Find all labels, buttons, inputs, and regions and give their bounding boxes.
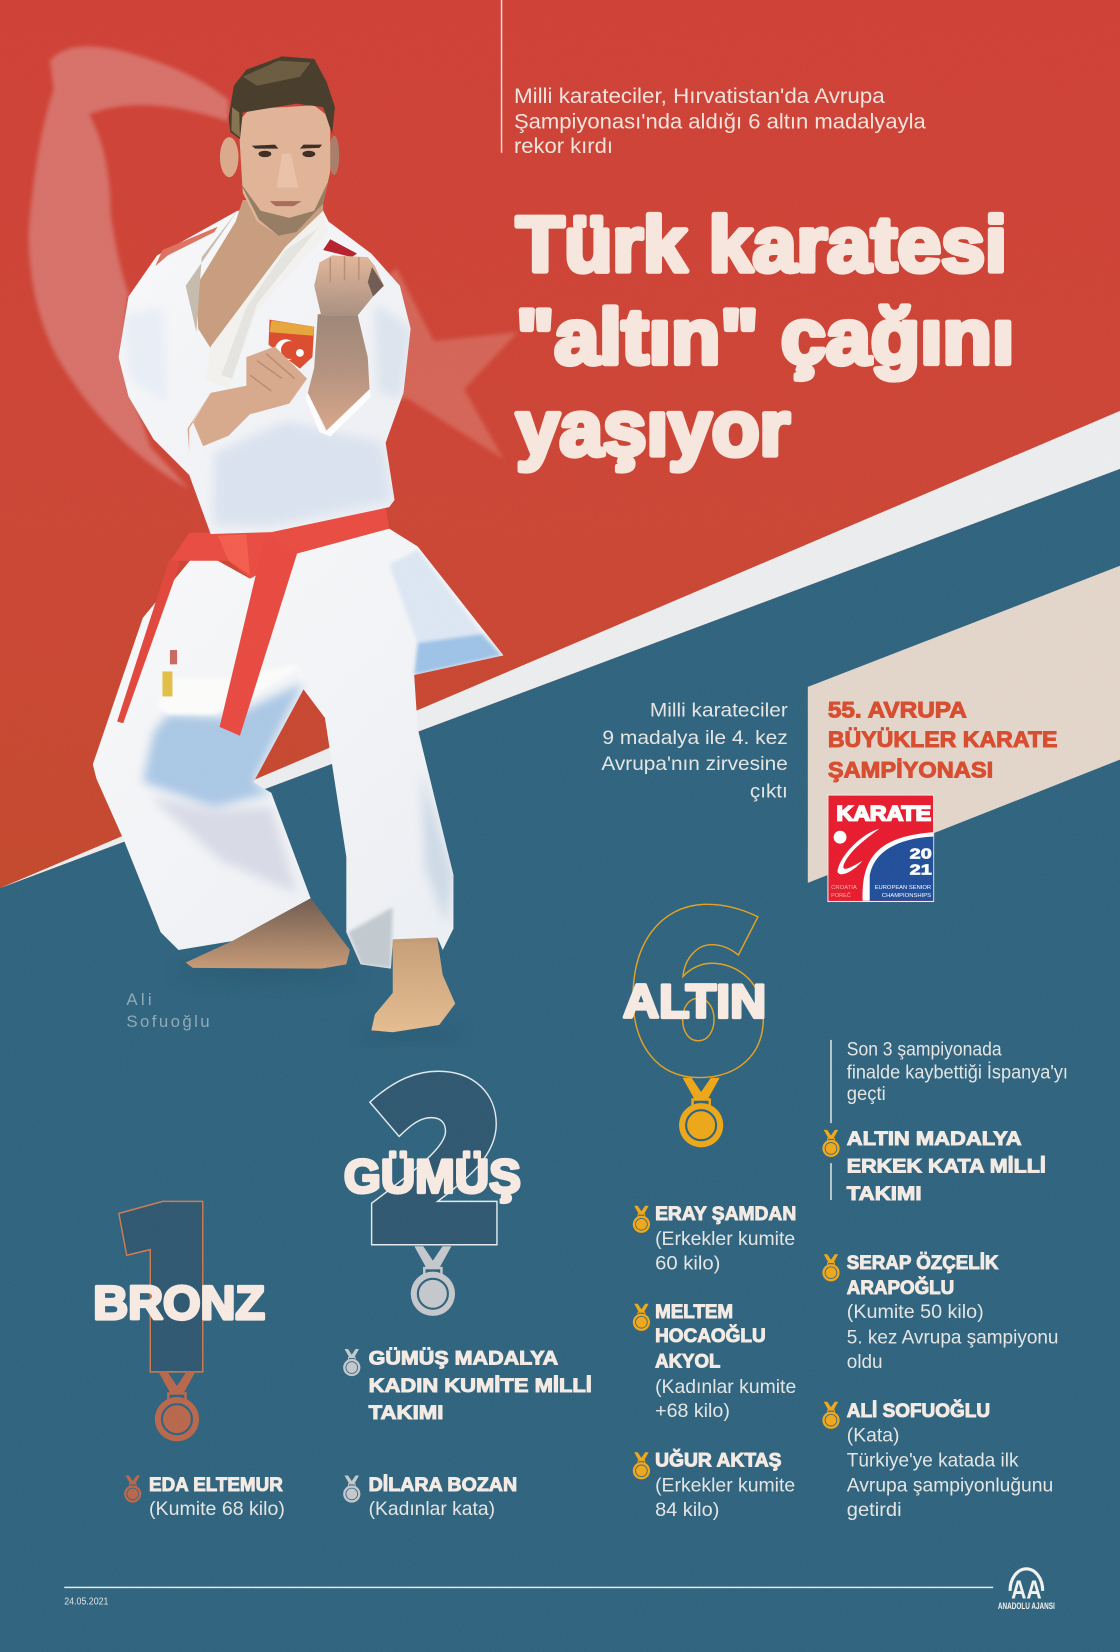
- gold entry: men's kata team: Son 3 şampiyonada: [847, 1040, 1002, 1061]
- medal: silver large: [411, 1246, 455, 1316]
- bronze entry: (Kumite 68 kilo): [149, 1499, 285, 1520]
- logo: European Karate 2021: KARATE: [836, 801, 931, 825]
- subtitle: Şampiyonası'nda aldığı 6 altın madalyayla: [514, 111, 926, 134]
- gold entry: Meltem Hocaoğlu Akyol: MELTEM: [655, 1302, 733, 1323]
- subtitle: [514, 85, 926, 158]
- silver entry: women's kumite team: TAKIMI: [369, 1403, 443, 1424]
- silver entry: Dilara Bozan: (Kadınlar kata): [369, 1499, 495, 1520]
- logo: Anadolu Ajansı: AA: [1011, 1574, 1042, 1604]
- label: BRONZ: BRONZ: [93, 1277, 265, 1330]
- gold entry: Ali Sofuoğlu: [822, 1400, 1053, 1521]
- title: [516, 200, 1014, 472]
- numeral 6 outline: [633, 904, 763, 1078]
- gold entry: men's kata team: ALTIN MADALYA: [847, 1129, 1022, 1150]
- icon: gold medal: [822, 1254, 840, 1281]
- gold entry: men's kata team: ERKEK KATA MİLLİ: [847, 1157, 1046, 1178]
- title: "altın" çağını: [516, 292, 1014, 380]
- logo: Anadolu Ajansı: [998, 1569, 1055, 1611]
- ears: [220, 137, 239, 177]
- text: nine medals: 9 madalya ile 4. kez: [602, 728, 788, 749]
- text: nine medals: [601, 700, 788, 803]
- flag badge: [268, 320, 314, 369]
- gold entry: Eray Şamdan: (Erkekler kumite: [655, 1229, 795, 1250]
- logo: European Karate 2021: [828, 795, 934, 901]
- text: nine medals: Avrupa'nın zirvesine: [601, 754, 788, 775]
- gold entry: Meltem Hocaoğlu Akyol: [633, 1302, 796, 1422]
- gold entry: Meltem Hocaoğlu Akyol: AKYOL: [655, 1352, 720, 1373]
- subtitle: rekor kırdı: [514, 135, 613, 158]
- icon: gold medal: [633, 1452, 650, 1479]
- numeral 1 outline: [119, 1201, 203, 1372]
- section: gold six: [623, 904, 766, 1147]
- feet: [186, 898, 350, 969]
- upper body: [119, 56, 411, 534]
- gold entry: Eray Şamdan: ERAY ŞAMDAN: [655, 1204, 796, 1225]
- icon: bronze medal: [124, 1475, 141, 1503]
- ground shadows: [179, 965, 458, 1040]
- icon: silver medal: [343, 1475, 360, 1503]
- championship heading: BÜYÜKLER KARATE: [828, 727, 1057, 752]
- gold entry: Ali Sofuoğlu: Avrupa şampiyonluğunu: [847, 1475, 1053, 1496]
- gold entry: Uğur Aktaş: UĞUR AKTAŞ: [655, 1450, 781, 1472]
- gold entry: Serap Özçelik Arapoğlu: (Kumite 50 kilo): [847, 1302, 984, 1323]
- logo: Anadolu Ajansı: ANADOLU AJANSI: [998, 1601, 1055, 1611]
- hair: [229, 56, 335, 139]
- championship heading: 55. AVRUPA: [828, 697, 967, 722]
- icon: gold medal: [822, 1402, 840, 1429]
- icon: gold medal: [822, 1130, 840, 1157]
- gi jacket: [119, 211, 411, 534]
- flag crescent and star: [29, 46, 518, 489]
- sleeve lettering: [155, 227, 218, 266]
- gold entry: Eray Şamdan: [633, 1204, 796, 1275]
- logo: European Karate 2021: CROATIA: [831, 885, 857, 891]
- background: red field: [0, 0, 1120, 906]
- gold entry: Serap Özçelik Arapoğlu: [822, 1253, 1058, 1373]
- bronze entry: EDA ELTEMUR: [149, 1475, 283, 1496]
- label: GÜMÜŞ: GÜMÜŞ: [344, 1151, 521, 1204]
- lower body: [93, 507, 503, 1032]
- gold entry: Meltem Hocaoğlu Akyol: (Kadınlar kumite: [655, 1377, 796, 1398]
- title: Türk karatesi: [516, 200, 1007, 288]
- forearm and fist, right: [308, 313, 370, 430]
- logo: European Karate 2021: 20: [910, 846, 932, 863]
- subtitle: Milli karateciler, Hırvatistan'da Avrupa: [514, 85, 885, 108]
- logo: European Karate 2021: 21: [910, 861, 932, 878]
- section: silver two: [344, 1071, 521, 1316]
- gold entry: Serap Özçelik Arapoğlu: oldu: [847, 1352, 883, 1373]
- athlete photo illustration: [93, 56, 503, 1040]
- trouser shading: [143, 550, 502, 969]
- gold entry: Eray Şamdan: 60 kilo): [655, 1254, 720, 1275]
- medal: gold large: [679, 1078, 723, 1147]
- athlete caption: [126, 990, 210, 1031]
- gold entry: men's kata team: finalde kaybettiği İspanya'yı: [847, 1062, 1068, 1083]
- gold entry: Uğur Aktaş: (Erkekler kumite: [655, 1475, 795, 1496]
- collar: [205, 211, 328, 389]
- section: bronze one: [93, 1201, 265, 1441]
- jacket shading: [121, 304, 411, 525]
- icon: gold medal: [633, 1206, 650, 1233]
- background: teal lower field: [0, 469, 1120, 1652]
- gold entry: Meltem Hocaoğlu Akyol: +68 kilo): [655, 1401, 730, 1422]
- label: ALTIN: ALTIN: [623, 976, 766, 1029]
- icon: gold medal: [633, 1304, 650, 1331]
- logo: European Karate 2021: POREČ: [831, 892, 851, 899]
- gold entry: Ali Sofuoğlu: ALİ SOFUOĞLU: [847, 1400, 990, 1422]
- gold entry: men's kata team: TAKIMI: [847, 1184, 922, 1205]
- athlete caption: Sofuoğlu: [126, 1012, 210, 1031]
- gold entry: Ali Sofuoğlu: Türkiye'ye katada ilk: [847, 1451, 1019, 1472]
- championship heading: ŞAMPİYONASI: [828, 758, 993, 783]
- title: yaşıyor: [516, 384, 790, 472]
- gold entry: Serap Özçelik Arapoğlu: ARAPOĞLU: [847, 1277, 954, 1299]
- gold entry: Ali Sofuoğlu: getirdi: [847, 1500, 902, 1521]
- bronze entry: [124, 1475, 285, 1520]
- vertical rule beside subtitle: [501, 0, 502, 153]
- gold entry: men's kata team: geçti: [847, 1084, 886, 1105]
- gold entry: Ali Sofuoğlu: (Kata): [847, 1425, 899, 1446]
- gold entry: Uğur Aktaş: 84 kilo): [655, 1500, 719, 1521]
- text: nine medals: Milli karateciler: [650, 700, 788, 721]
- silver entry: women's kumite team: GÜMÜŞ MADALYA: [369, 1348, 559, 1369]
- belt: [168, 507, 389, 579]
- numeral 2 outline: [370, 1071, 497, 1245]
- footer rule: [64, 1587, 993, 1588]
- gold entry: Serap Özçelik Arapoğlu: SERAP ÖZÇELİK: [847, 1253, 999, 1274]
- logo: European Karate 2021: CHAMPIONSHIPS: [882, 893, 931, 899]
- silver entry: women's kumite team: [343, 1348, 592, 1424]
- championship heading: [828, 697, 1057, 783]
- medal: bronze large: [155, 1372, 199, 1441]
- silver entry: Dilara Bozan: [343, 1475, 517, 1520]
- icon: silver medal: [343, 1349, 360, 1376]
- text: nine medals: çıktı: [750, 782, 788, 803]
- gold entry: Meltem Hocaoğlu Akyol: HOCAOĞLU: [655, 1325, 766, 1347]
- gold entry: men's kata team: [822, 1040, 1068, 1205]
- head: face: [239, 105, 330, 236]
- forearm and fist, left: [187, 346, 307, 452]
- athlete caption: Ali: [126, 990, 152, 1009]
- silver entry: Dilara Bozan: DİLARA BOZAN: [369, 1475, 517, 1496]
- diagonal white band: [0, 411, 1120, 888]
- trousers: [93, 529, 503, 969]
- diagonal beige panel: [808, 566, 1120, 883]
- belt patches: [170, 650, 177, 664]
- chest skin: [196, 200, 323, 348]
- gold entry: Uğur Aktaş: [633, 1450, 795, 1521]
- date: 24.05.2021: [64, 1597, 109, 1608]
- eyes and mouth: [252, 145, 322, 157]
- vertical rule: [830, 1040, 832, 1200]
- logo: European Karate 2021: EUROPEAN SENIOR: [875, 885, 931, 891]
- silver entry: women's kumite team: KADIN KUMİTE MİLLİ: [369, 1376, 592, 1397]
- gold entry: Serap Özçelik Arapoğlu: 5. kez Avrupa şampiyonu: [847, 1327, 1058, 1348]
